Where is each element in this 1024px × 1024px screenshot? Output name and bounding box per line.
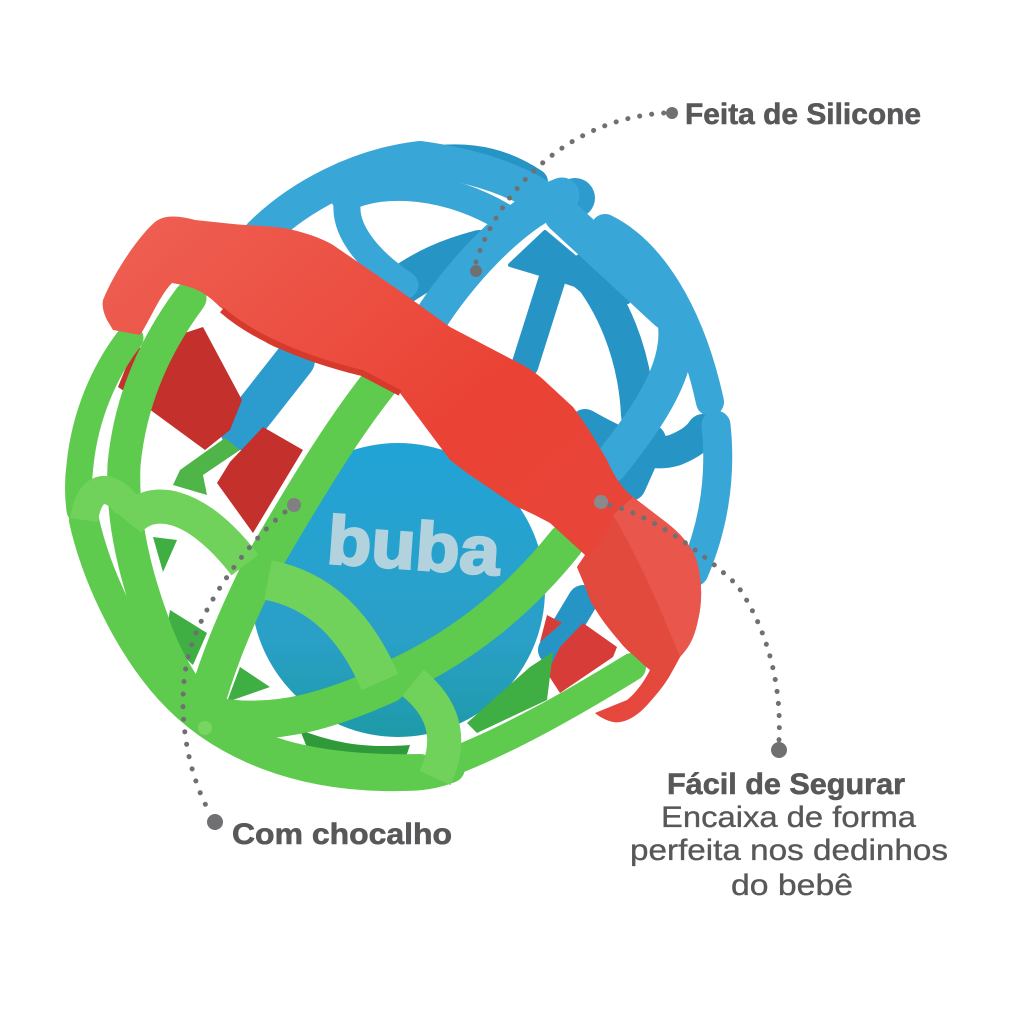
callout: Fácil de Segurar: Encaixa de forma xyxy=(661,801,916,834)
inner ball with logo xyxy=(251,443,545,737)
band shaded underside xyxy=(222,310,400,393)
callout: Fácil de Segurar xyxy=(594,495,948,902)
rattle toy xyxy=(78,157,718,778)
callout: Feita de Silicone: Feita de Silicone xyxy=(685,98,921,131)
blue silicone cage, front strands xyxy=(240,158,718,572)
back red tabs xyxy=(118,327,617,693)
callout: Fácil de Segurar: perfeita nos dedinhos xyxy=(630,834,948,867)
callout: Feita de Silicone xyxy=(470,98,921,277)
green silicone cage, front strands xyxy=(78,298,632,776)
callout: Com chocalho xyxy=(183,498,452,851)
callout: Fácil de Segurar: do bebê xyxy=(731,869,853,902)
logo buba: buba xyxy=(325,502,504,590)
blue silicone cage, back strands xyxy=(395,157,703,650)
callout: Fácil de Segurar: Fácil de Segurar xyxy=(667,768,905,801)
green lighter arches xyxy=(84,490,444,778)
red band xyxy=(103,216,701,722)
green silicone cage, back strands xyxy=(153,438,553,760)
band inner shaded fold xyxy=(577,515,680,680)
band right section xyxy=(613,497,701,657)
callout: Com chocalho: Com chocalho xyxy=(232,818,452,851)
